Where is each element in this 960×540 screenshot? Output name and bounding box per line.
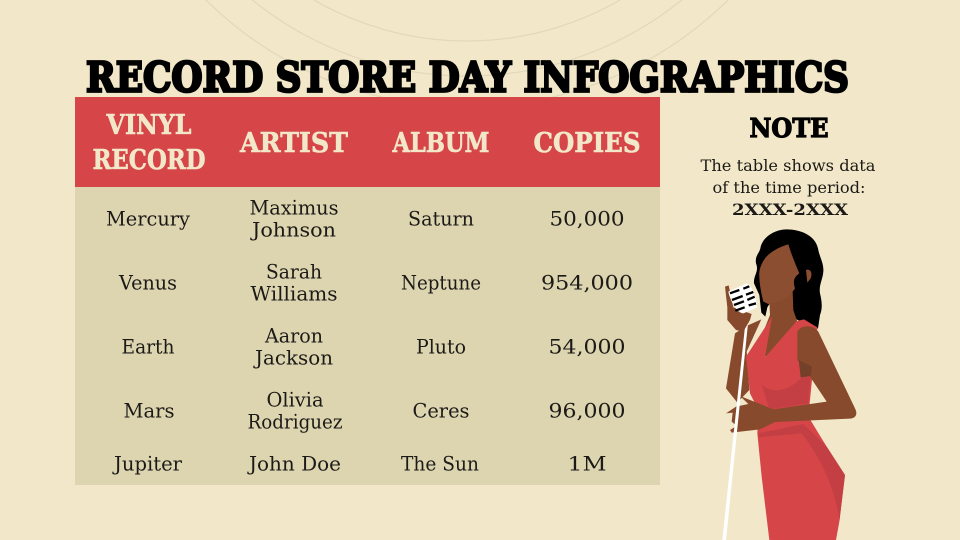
header: vinyl record: VINYL	[106, 110, 192, 141]
near arm	[726, 326, 856, 433]
row: Jupiter: The Sun	[401, 452, 479, 476]
note text: 2XXX-2XXX	[732, 200, 849, 219]
row: Earth: Jackson	[253, 346, 333, 370]
row: Jupiter	[112, 452, 607, 476]
row: Mars: Mars	[124, 398, 174, 422]
row: Earth: Aaron	[264, 324, 323, 348]
header: vinyl record: RECORD	[92, 145, 206, 176]
row: Mercury: Johnson	[250, 218, 336, 242]
row: Venus	[118, 260, 633, 306]
header: album: ALBUM	[392, 128, 490, 159]
hair	[754, 229, 823, 329]
note text	[700, 157, 876, 219]
row: Earth: Earth	[122, 334, 175, 358]
row: Mars	[124, 388, 626, 434]
row: Venus: Neptune	[401, 270, 481, 294]
arm shadow	[799, 360, 812, 377]
dress shading	[758, 377, 845, 522]
row: Earth: Pluto	[416, 334, 466, 358]
ear	[806, 270, 811, 283]
note text: of the time period:	[712, 179, 866, 197]
row: Mars: Olivia	[266, 388, 324, 412]
table header band	[75, 97, 660, 187]
header: vinyl record	[92, 110, 206, 176]
row: Mercury: Mercury	[106, 206, 191, 230]
row: Mercury	[106, 196, 624, 242]
row: Mars: 96,000	[548, 398, 626, 422]
microphone stand	[722, 323, 748, 540]
header: artist: ARTIST	[239, 128, 348, 159]
row: Venus: 954,000	[541, 270, 633, 294]
row: Mars: Ceres	[412, 398, 470, 422]
hand on microphone	[725, 285, 752, 332]
row: Jupiter: Jupiter	[112, 452, 182, 476]
row: Mercury: Maximus	[250, 196, 338, 220]
dress	[746, 317, 845, 540]
row: Mars: Rodriguez	[248, 410, 342, 434]
header: copies: COPIES	[534, 128, 640, 159]
row: Jupiter: 1M	[568, 452, 606, 476]
table	[75, 97, 660, 485]
far arm	[726, 319, 761, 403]
face	[759, 244, 799, 304]
illustration: singer with microphone	[722, 229, 856, 540]
title: RECORD STORE DAY INFOGRAPHICS	[86, 52, 849, 101]
table body panel	[75, 187, 660, 485]
row: Jupiter: John Doe	[247, 452, 341, 476]
microphone head	[728, 283, 757, 313]
row: Venus: Venus	[118, 270, 177, 294]
row: Mercury: Saturn	[408, 206, 474, 230]
note text: The table shows data	[700, 157, 876, 175]
row: Mercury: 50,000	[550, 206, 624, 230]
row: Venus: Williams	[250, 282, 338, 306]
row: Earth	[122, 324, 626, 370]
row: Venus: Sarah	[266, 260, 322, 284]
microphone grille	[730, 286, 756, 311]
neck and shoulders	[763, 292, 797, 357]
note heading: NOTE	[750, 114, 828, 144]
row: Earth: 54,000	[548, 334, 626, 358]
